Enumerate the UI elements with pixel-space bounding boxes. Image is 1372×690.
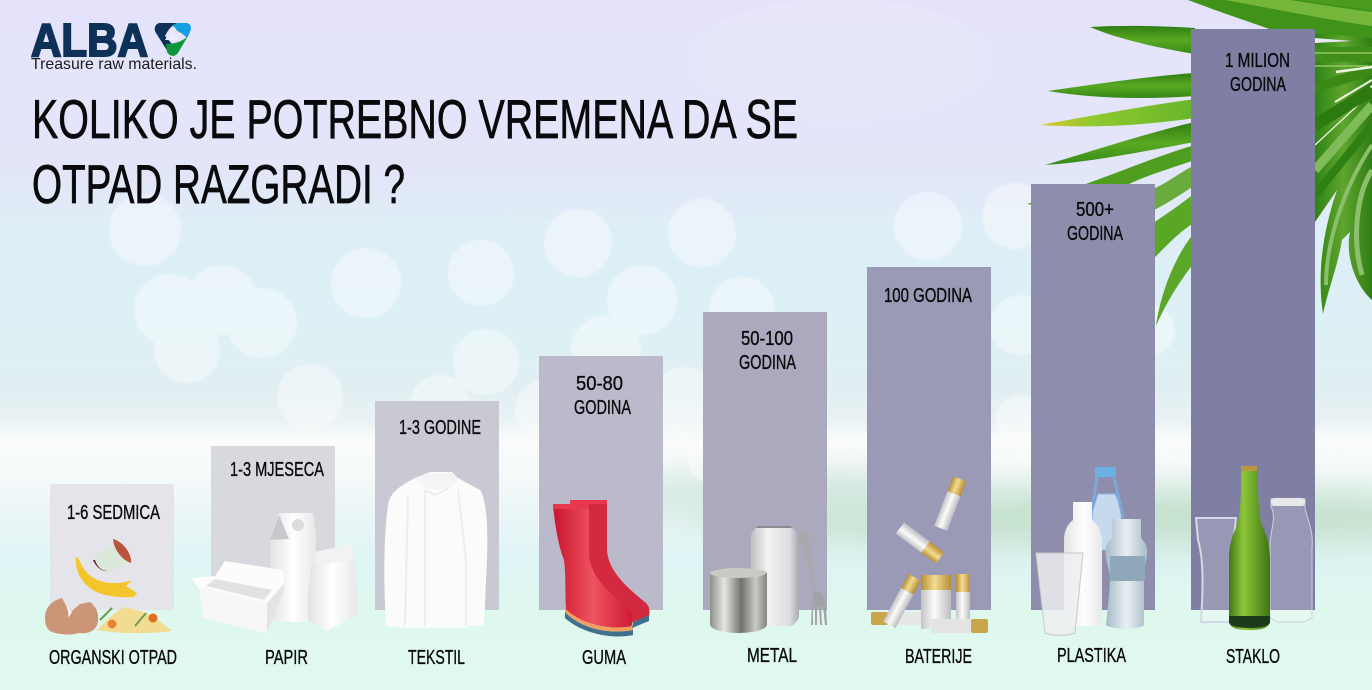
lying battery front — [931, 619, 971, 633]
icon: metal items — [710, 526, 827, 633]
tagline: Treasure raw materials. — [31, 56, 197, 73]
icon: glass containers — [1196, 466, 1312, 630]
logo — [31, 14, 197, 73]
bar: guma — [539, 356, 663, 610]
duration: metal — [739, 328, 796, 374]
large battery — [921, 575, 951, 590]
banana — [76, 557, 137, 597]
title: OTPAD RAZGRADI ? — [32, 153, 405, 215]
duration labels — [67, 50, 1290, 524]
apple core — [93, 539, 131, 571]
box — [191, 561, 284, 633]
leaning battery — [883, 574, 921, 628]
eggshell — [45, 598, 98, 635]
duration: papir: 1-3 MJESECA — [230, 459, 324, 481]
duration: staklo: 1 MILION — [1225, 50, 1290, 72]
category: staklo: STAKLO — [1226, 646, 1280, 668]
logo mark — [155, 23, 191, 56]
bar: plastika — [1031, 184, 1155, 610]
tin can — [710, 568, 767, 633]
duration: guma: 50-80 — [576, 373, 623, 395]
milk bottle — [1270, 499, 1312, 622]
bar: tekstil — [375, 401, 499, 610]
duration: guma: GODINA — [574, 397, 631, 419]
title — [32, 88, 798, 215]
duration: organski otpad: 1-6 SEDMICA — [67, 502, 160, 524]
duration: baterije: 100 GODINA — [884, 285, 972, 307]
palm leaves — [1027, 0, 1372, 326]
pint glass — [1196, 518, 1236, 622]
category: plastika: PLASTIKA — [1057, 645, 1126, 667]
bar chart — [50, 29, 1315, 610]
shampoo bottle — [1105, 519, 1147, 629]
category: papir: PAPIR — [265, 647, 308, 669]
category: organski otpad: ORGANSKI OTPAD — [49, 647, 177, 669]
category labels — [49, 645, 1280, 669]
white detergent bottle — [1064, 502, 1102, 626]
category: metal: METAL — [747, 645, 797, 667]
bar: organski otpad — [50, 484, 174, 610]
icon: white shirt — [384, 472, 487, 628]
duration: metal: GODINA — [739, 352, 796, 374]
bar: staklo — [1191, 29, 1315, 610]
icon: batteries — [871, 476, 988, 633]
duration: plastika — [1067, 199, 1123, 245]
category: tekstil: TEKSTIL — [408, 647, 465, 669]
falling battery 2 — [896, 522, 944, 564]
carton — [270, 513, 316, 622]
duration: staklo — [1225, 50, 1290, 96]
logo wordmark: ALBA — [31, 14, 148, 66]
icon: paper packaging — [191, 513, 357, 633]
duration: staklo: GODINA — [1230, 74, 1286, 96]
icon: organic waste — [45, 539, 172, 635]
falling battery 1 — [934, 476, 966, 531]
bar: papir — [211, 446, 335, 610]
green beer bottle — [1229, 466, 1270, 630]
bar: baterije — [867, 267, 991, 610]
category: baterije: BATERIJE — [905, 646, 972, 668]
title: KOLIKO JE POTREBNO VREMENA DA SE — [32, 88, 798, 150]
standing battery — [956, 574, 970, 592]
duration: guma — [574, 373, 631, 419]
fork — [799, 530, 827, 625]
duration: metal: 50-100 — [741, 328, 793, 350]
duration: plastika: GODINA — [1067, 223, 1123, 245]
lying battery back — [871, 612, 923, 625]
duration: plastika: 500+ — [1076, 199, 1114, 221]
icon: plastic containers — [1036, 467, 1147, 635]
icon: red rubber boots — [553, 500, 650, 636]
aluminium can — [751, 526, 799, 626]
bar: metal — [703, 312, 827, 610]
duration: tekstil: 1-3 GODINE — [399, 417, 481, 439]
category: guma: GUMA — [582, 647, 626, 669]
paper bag — [308, 544, 357, 631]
pasta scraps — [97, 607, 172, 633]
plastic cup — [1036, 553, 1083, 635]
water bottle — [1088, 494, 1122, 550]
